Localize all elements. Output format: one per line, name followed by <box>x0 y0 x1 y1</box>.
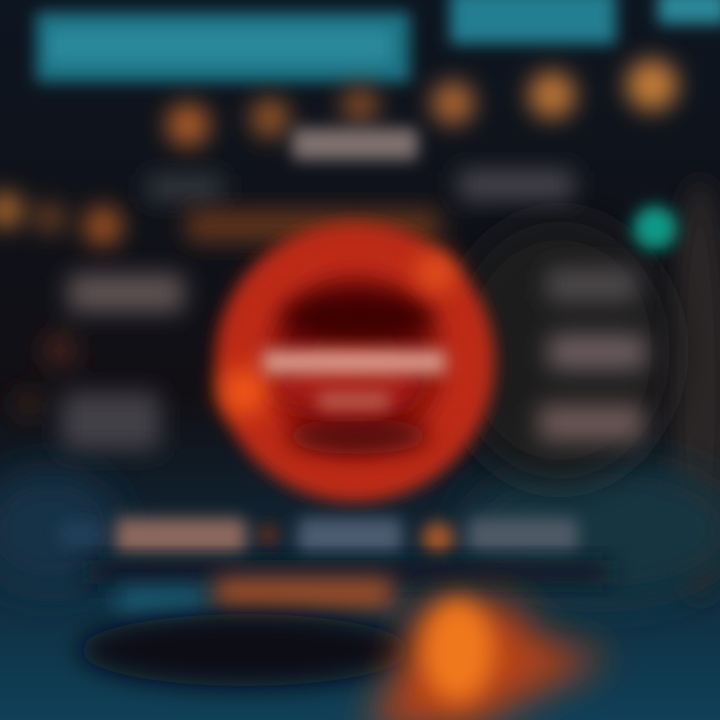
heading block <box>292 128 418 160</box>
top teal panels <box>36 0 720 82</box>
right labels <box>538 268 646 442</box>
ring inner red <box>265 359 425 411</box>
central red ring <box>215 222 495 502</box>
ring subtitle text block <box>318 392 390 410</box>
left labels <box>14 274 184 450</box>
ring title text block <box>262 350 446 374</box>
dark strip below labels <box>90 560 610 584</box>
bottom row labels <box>60 518 578 554</box>
ring inner dark top <box>282 292 434 344</box>
bottom teal label <box>116 588 208 614</box>
orange band <box>214 578 394 608</box>
upper left label <box>146 174 224 202</box>
upper right label <box>458 170 574 200</box>
left orange lights <box>0 192 123 246</box>
ring highlights <box>416 252 456 292</box>
flame glow <box>365 598 610 720</box>
row of orange lights <box>166 59 678 147</box>
ring inner dark bottom <box>286 418 430 454</box>
teal badge <box>633 206 677 250</box>
dark oval <box>80 614 410 686</box>
orange subtitle band <box>186 210 440 242</box>
